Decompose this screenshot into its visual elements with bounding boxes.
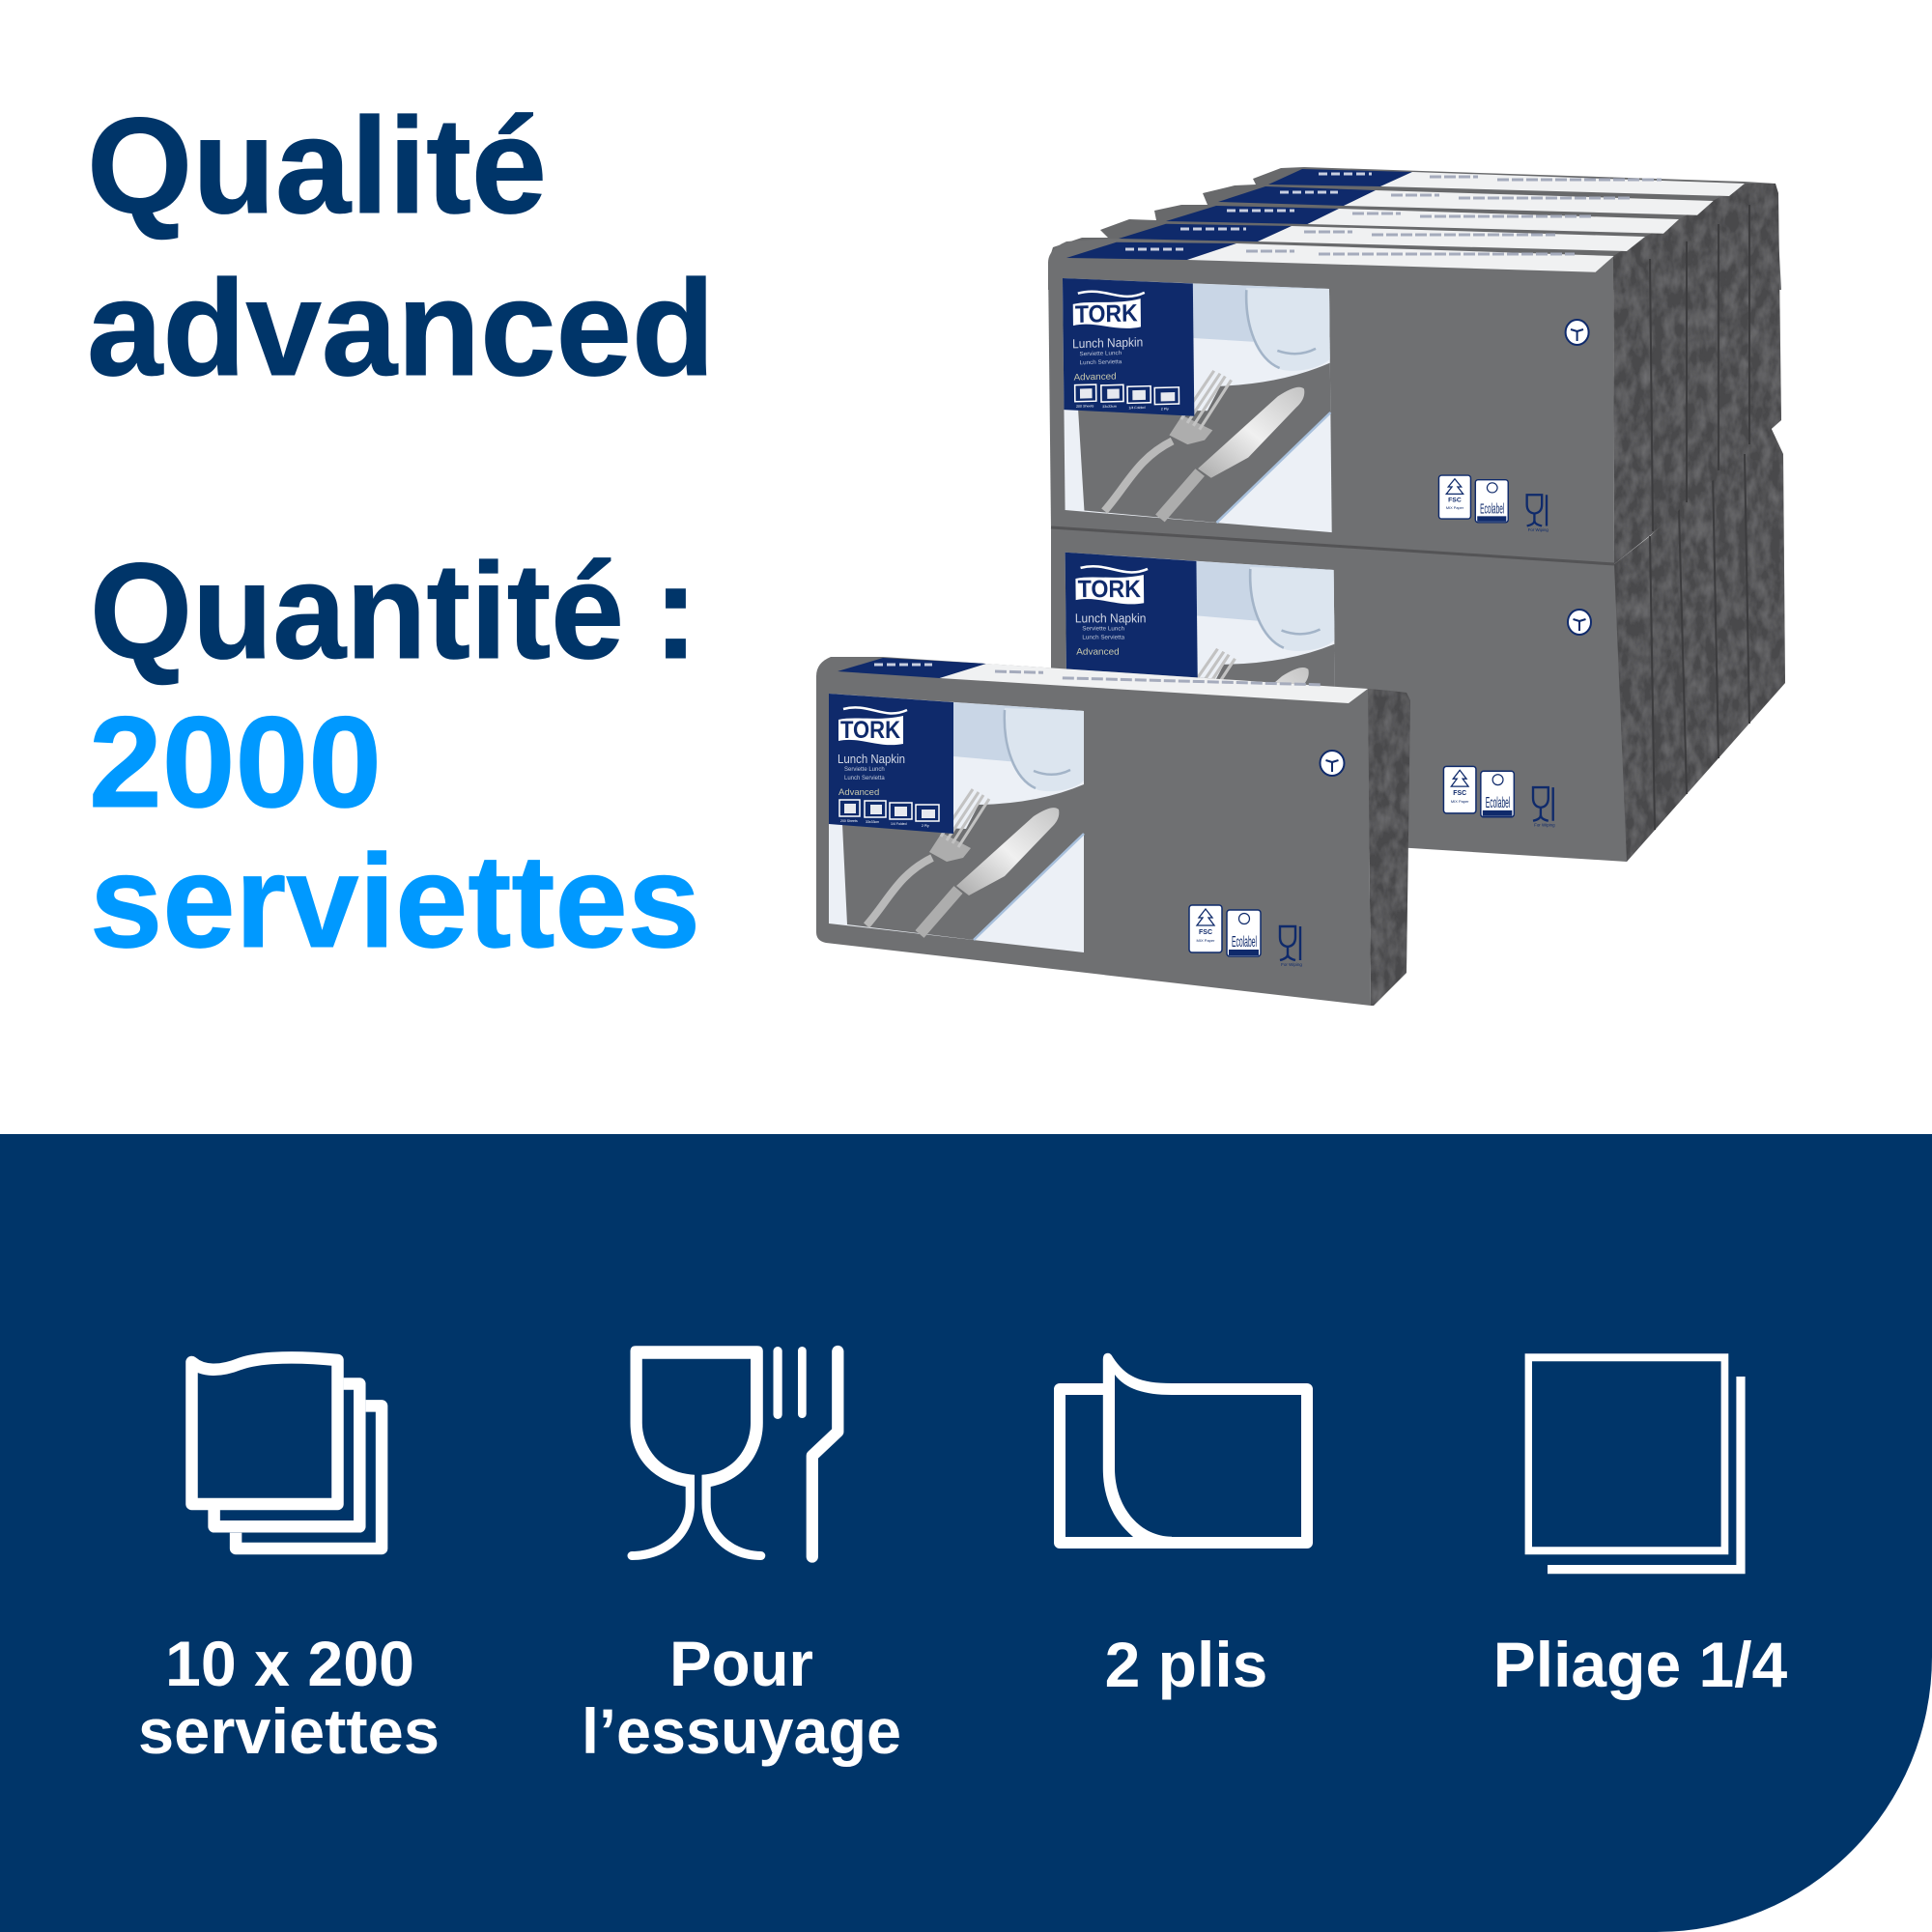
lower stack side — [1614, 425, 1785, 862]
heading: Qualité advanced: advanced — [87, 251, 715, 404]
lower pack label — [1065, 553, 1336, 813]
upper pack label: Serviette Lunch — [1080, 350, 1122, 357]
foreground pack certification marks: Ecolabel — [1232, 934, 1257, 951]
foreground pack label: TORK — [840, 717, 900, 744]
lower pack label: Lunch Napkin — [1075, 611, 1147, 625]
label: Pour l'essuyage: l’essuyage — [582, 1695, 901, 1767]
foreground pack label: 2 Ply — [922, 824, 929, 828]
upper pack certification marks — [1438, 475, 1548, 532]
foreground pack side — [1368, 689, 1410, 1006]
label: Pour l'essuyage: Pour — [669, 1628, 813, 1699]
seam between stacks — [1051, 527, 1614, 564]
foreground pack label: 200 Sheets — [840, 819, 858, 823]
heading: Qualité advanced: Qualité — [87, 89, 547, 242]
upper stack backdrop and humps — [1048, 167, 1781, 290]
top bands of the packs, back to front — [1119, 169, 1745, 251]
label: 2 plis: 2 plis — [1105, 1629, 1267, 1700]
icon: quarter fold — [1525, 1353, 1746, 1574]
upper pack circle mark — [1566, 320, 1589, 345]
foreground pack top band — [838, 658, 1368, 703]
heading: 2000 serviettes: 2000 — [89, 691, 382, 835]
lower stack front — [1051, 526, 1627, 862]
upper pack certification marks: FSC — [1448, 497, 1462, 504]
panel: features — [0, 1134, 1932, 1932]
foreground pack label — [829, 694, 1084, 952]
lower pack circle mark — [1568, 610, 1591, 635]
foreground pack label: Advanced — [838, 787, 879, 798]
foreground pack circle mark — [1320, 751, 1345, 776]
product: stacked napkin packs — [816, 167, 1785, 1006]
upper pack label: Advanced — [1073, 372, 1117, 384]
foreground pack label: 33x33cm — [866, 820, 879, 824]
foreground pack label: Lunch Servietta — [844, 776, 885, 781]
lower pack certification marks: Ecolabel — [1486, 795, 1510, 811]
upper stack side — [1613, 184, 1781, 564]
lower pack certification marks: MIX Paper — [1451, 799, 1469, 804]
upper pack certification marks: Ecolabel — [1480, 501, 1504, 517]
foreground pack label: Lunch Napkin — [838, 752, 905, 766]
foreground pack certification marks: FSC — [1199, 929, 1212, 936]
upper pack label: 33x33cm — [1102, 405, 1117, 409]
lower pack certification marks: FSC — [1453, 790, 1466, 797]
label: 10 x 200 serviettes: serviettes — [138, 1695, 440, 1767]
lower pack certification marks: For Wiping — [1534, 823, 1555, 828]
foreground pack certification marks — [1189, 905, 1302, 967]
upper pack label: Lunch Servietta — [1080, 358, 1122, 366]
lower pack label: Lunch Servietta — [1082, 635, 1125, 640]
heading: Quantité: Quantité — [90, 534, 624, 687]
upper pack label: TORK — [1075, 300, 1138, 328]
foreground pack certification marks: For Wiping — [1281, 962, 1302, 967]
upper pack label: 1/4 Folded — [1128, 406, 1146, 410]
icon: two-ply napkin — [1060, 1353, 1307, 1548]
lower pack label: Advanced — [1076, 647, 1120, 658]
foreground pack label: 1/4 Folded — [891, 822, 907, 826]
upper stack front pack face — [1048, 239, 1614, 564]
upper pack label: 200 Sheets — [1076, 404, 1094, 409]
label: Pliage 1/4: Pliage 1/4 — [1493, 1629, 1788, 1700]
heading: 2000 serviettes — [89, 691, 700, 976]
upper pack label: 2 Ply — [1161, 407, 1169, 412]
heading: 2000 serviettes: serviettes — [90, 828, 700, 976]
upper pack certification marks: MIX Paper — [1446, 506, 1464, 510]
foreground pack front — [816, 657, 1371, 1006]
upper pack label: Lunch Napkin — [1072, 335, 1143, 351]
label: 10 x 200 serviettes — [138, 1628, 440, 1767]
foreground pack label: Serviette Lunch — [844, 767, 885, 773]
upper pack certification marks: For Wiping — [1528, 527, 1548, 532]
lower pack certification marks — [1443, 766, 1555, 828]
lower pack label: TORK — [1077, 577, 1141, 603]
label: Pour l'essuyage — [582, 1628, 901, 1767]
icon: stacked napkins — [191, 1357, 382, 1548]
heading: Qualité advanced — [87, 89, 715, 404]
label: 10 x 200 serviettes: 10 x 200 — [165, 1628, 414, 1699]
foreground pack certification marks: MIX Paper — [1197, 938, 1215, 943]
lower pack label: Serviette Lunch — [1082, 626, 1125, 632]
heading: Quantité: : — [653, 534, 698, 687]
icon: wine glass and fork — [628, 1346, 838, 1560]
front pack top band — [1066, 242, 1614, 272]
upper pack label — [1063, 271, 1332, 539]
